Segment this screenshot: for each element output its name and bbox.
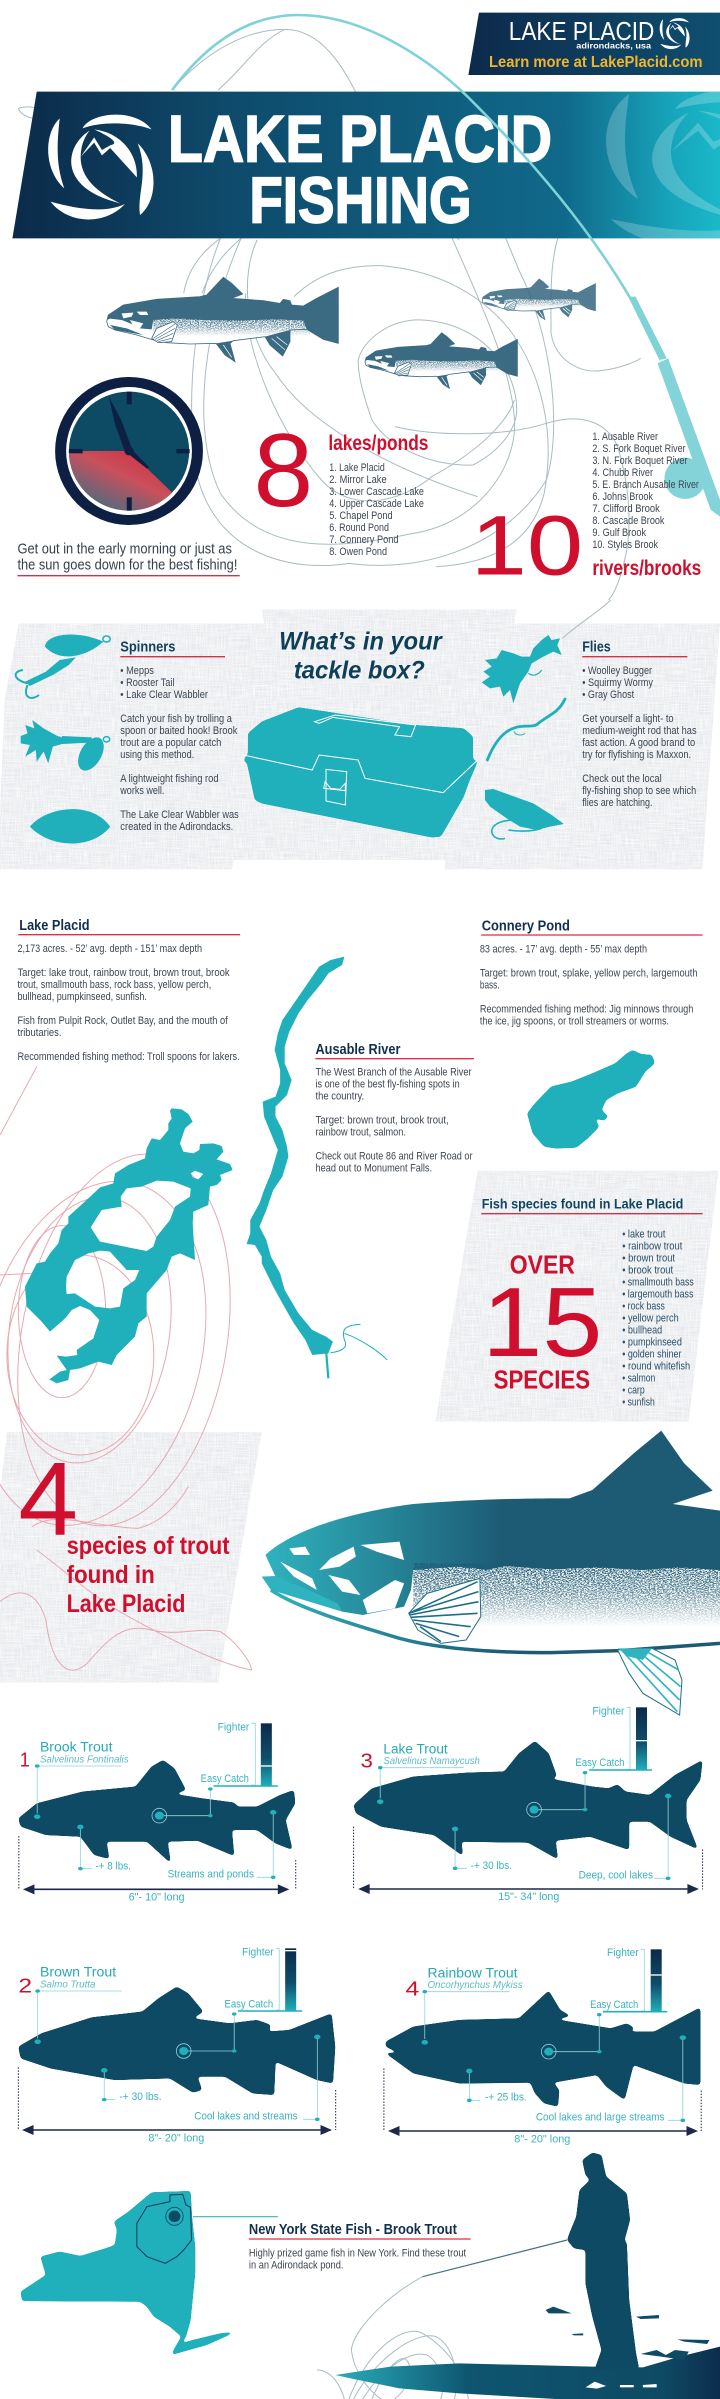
icon: reel [664, 458, 706, 499]
pelvic fin [618, 1648, 682, 1715]
text: flies: flies are hatching. [582, 796, 653, 808]
species list: • rock bass [622, 1299, 665, 1312]
text: spinners: works well. [120, 784, 164, 796]
title banner [12, 89, 720, 246]
rivers list: 4. Chubb River [592, 466, 653, 478]
lakes list: 3. Lower Cascade Lake [329, 485, 424, 497]
text: Ausable River: rainbow trout, salmon. [315, 1125, 406, 1138]
trout card 4: rainbow trout: Oncorhynchus Mykiss [428, 1980, 523, 1990]
fish lower jaw [262, 1576, 342, 1612]
decorative pink line loops [0, 1067, 254, 1670]
rod [422, 2240, 567, 2277]
text: flies: • Gray Ghost [582, 688, 634, 700]
fish speckled flank [413, 1563, 720, 1627]
rivers list: 9. Gulf Brook [592, 526, 647, 538]
trout card 4: rainbow trout: Fighter [607, 1946, 639, 1958]
trout card 1: brook trout: -+ 8 lbs. [96, 1859, 131, 1872]
trout card 2: brown trout: Easy Catch [225, 1998, 273, 2010]
paint splashes [546, 2307, 709, 2389]
species list: • pumpkinseed [622, 1336, 682, 1348]
text: Ausable River: The West Branch of the Ausable River [315, 1065, 472, 1078]
callout: 4 species of trout: Lake Placid [67, 1590, 186, 1618]
text: New York State Fish: in an Adirondack pond. [249, 2259, 343, 2271]
icon: fly 2 [485, 789, 564, 839]
header badge: Lake Placid link [468, 13, 720, 75]
text: Lake Placid: Recommended fishing method: Troll spoons for lakers. [17, 1050, 240, 1062]
map: Lake Placid [25, 1108, 233, 1383]
trout card 4: rainbow trout: 8"- 20" long [514, 2132, 570, 2145]
text: Lake Placid: bullhead, pumpkinseed, sunfish. [17, 990, 147, 1002]
text: spinners: using this method. [120, 748, 194, 760]
trout card 4: rainbow trout: 4 [405, 1977, 419, 2001]
species list: • brook trout [622, 1263, 673, 1276]
icon: ghost logo [606, 89, 720, 246]
callout: over 15 species: OVER [510, 1250, 575, 1279]
lakes list: 7. Connery Pond [329, 533, 399, 545]
trout card 1: brook trout [18, 1721, 296, 1903]
species list: • brown trout [622, 1251, 675, 1264]
icon: spinner 1 [16, 635, 110, 698]
species list [622, 1227, 694, 1408]
text: New York State Fish: Highly prized game fish in New York. Find these trout [249, 2247, 466, 2259]
trout card 2: brown trout: Fighter [242, 1946, 274, 1958]
text: flies: Check out the local [582, 772, 662, 784]
species list: • rainbow trout [622, 1239, 683, 1252]
fish underside outline [271, 1590, 720, 1653]
text: spinners: A lightweight fishing rod [120, 772, 219, 784]
clock hands [109, 397, 132, 452]
icon: worm [487, 699, 565, 760]
callout: over 15 species: SPECIES [494, 1365, 590, 1394]
text: Lake Placid: 2,173 acres. - 52’ avg. depth - 151’ max depth [17, 942, 202, 954]
trout card 2: brown trout: Salmo Trutta [40, 1979, 96, 1990]
text: Connery Pond [480, 917, 703, 1027]
text: spinners: • Mepps [120, 664, 154, 676]
rivers list: 8. Cascade Brook [592, 514, 665, 526]
text: Ausable River: Target: brown trout, brook trout, [315, 1113, 449, 1126]
illustration: large trout [262, 1431, 720, 1715]
callout: 4 species of trout [18, 1440, 230, 1618]
trout card 2: brown trout: Brown Trout [40, 1964, 116, 1980]
lakes list: 1. Lake Placid [329, 461, 385, 473]
species list: • lake trout [622, 1227, 666, 1240]
lakes and ponds count: 8 [253, 412, 313, 528]
text: Connery Pond: bass. [480, 978, 500, 991]
callout: 4 species of trout: 4 [18, 1440, 78, 1557]
trout card 1: brook trout: Easy Catch [201, 1772, 249, 1784]
hook line [563, 600, 611, 638]
species list: • yellow perch [622, 1311, 679, 1324]
lakes list: 4. Upper Cascade Lake [329, 497, 424, 509]
trout card 4: rainbow trout [384, 1946, 701, 2145]
panel: fish species [435, 1171, 719, 1422]
text: Lake Placid: tributaries. [17, 1026, 62, 1038]
pectoral fin [409, 1578, 481, 1643]
illustration: large trout [107, 277, 338, 362]
trout card 1: brook trout: Salvelinus Fontinalis [40, 1754, 129, 1765]
heading: what's in your tackle box: tackle box? [294, 656, 425, 684]
lakes list: 6. Round Pond [329, 521, 389, 533]
heading: what's in your tackle box [279, 627, 443, 684]
lakes and ponds count [253, 412, 428, 557]
rivers and brooks count: 10 [471, 498, 583, 593]
species list: • salmon [622, 1372, 655, 1384]
text: New York State Fish: New York State Fish - Brook Trout [249, 2221, 457, 2237]
lakes list [329, 461, 424, 557]
clock caption: the sun goes down for the best fishing! [17, 556, 237, 573]
text: spinners: • Rooster Tail [120, 676, 174, 688]
clock caption: Get out in the early morning or just as [17, 540, 232, 557]
text: flies: Flies [582, 638, 611, 655]
text: Ausable River: the country. [315, 1089, 364, 1102]
fish head highlights [280, 1542, 404, 1613]
lakes list: 5. Chapel Pond [329, 509, 393, 521]
text: flies [582, 638, 697, 808]
rivers list: 6. Johns Brook [592, 490, 653, 502]
trout card 2: brown trout [18, 1946, 336, 2144]
text: flies: • Woolley Bugger [582, 664, 653, 676]
trout card 1: brook trout: 6"- 10" long [129, 1891, 185, 1903]
trout card 3: lake trout: 15"- 34" long [498, 1890, 559, 1902]
text: Ausable River: Check out Route 86 and River Road or [315, 1149, 473, 1162]
text: spinners: Spinners [120, 638, 176, 655]
rivers list: 1. Ausable River [592, 430, 659, 442]
clock caption [17, 540, 240, 576]
text: Ausable River: head out to Monument Falls. [315, 1161, 432, 1174]
text: spinners: trout are a popular catch [120, 736, 221, 748]
fish upper body [265, 1431, 720, 1615]
trout card 1: brook trout: 1 [20, 1748, 30, 1772]
text: Lake Placid [17, 917, 240, 1062]
callout: 4 species of trout: found in [67, 1561, 155, 1589]
icon: spinner 3 [30, 809, 110, 844]
icon: logo [48, 115, 154, 219]
trout card 3: lake trout [354, 1704, 703, 1902]
silhouette [567, 2153, 639, 2369]
fishing lines [18, 29, 641, 600]
trout card 1: brook trout: Brook Trout [40, 1739, 113, 1755]
rivers and brooks count [471, 430, 701, 593]
trout card 3: lake trout: Salvelinus Namaycush [383, 1756, 480, 1766]
callout: over 15 species [482, 1250, 602, 1394]
trout card 3: lake trout: 3 [360, 1749, 373, 1773]
illustration: medium trout [365, 333, 517, 388]
fly line and rod [172, 15, 720, 517]
text: flies: • Squirmy Wormy [582, 676, 653, 688]
rivers list: 10. Styles Brook [592, 538, 658, 550]
panel: tackle box [0, 600, 720, 869]
text: Ausable River: is one of the best fly-fishing spots in [315, 1077, 460, 1090]
ground brush [335, 2347, 720, 2399]
trout card 1: brook trout: Streams and ponds [168, 1868, 254, 1880]
icon: tackle box [243, 707, 478, 837]
species list: • golden shiner [622, 1348, 682, 1360]
icon: fly 1 [482, 635, 562, 703]
rivers list [592, 430, 699, 550]
trout card 2: brown trout: -+ 30 lbs. [119, 2090, 162, 2102]
trout card 4: rainbow trout: -+ 25 lbs. [485, 2091, 527, 2103]
text: New York State Fish [249, 2221, 471, 2271]
illustration: small trout [482, 279, 595, 320]
title text: FISHING [249, 163, 472, 236]
text: spinners: • Lake Clear Wabbler [120, 688, 209, 700]
text: spinners: spoon or baited hook! Brook [120, 724, 238, 736]
illustration: fisherman [317, 2153, 720, 2399]
trout card 2: brown trout: 8"- 20" long [148, 2132, 204, 2144]
trout card 4: rainbow trout: Easy Catch [590, 1998, 638, 2010]
lakes list: 8. Owen Pond [329, 545, 387, 557]
species list: • sunfish [622, 1395, 655, 1408]
callout: over 15 species: 15 [482, 1267, 602, 1378]
trout card 3: lake trout: Easy Catch [575, 1756, 625, 1768]
title text [168, 102, 552, 236]
text: Lake Placid: Fish from Pulpit Rock, Outlet Bay, and the mouth of [17, 1014, 228, 1026]
fishing line loops [317, 2277, 468, 2399]
clock [55, 377, 203, 525]
trout card 3: lake trout: Lake Trout [383, 1741, 448, 1757]
map: Connery Pond [527, 1050, 655, 1148]
rivers list: 7. Clifford Brook [592, 502, 660, 514]
text: Ausable River [315, 1041, 474, 1174]
text: spinners: The Lake Clear Wabbler was [120, 808, 239, 820]
lakes and ponds count: lakes/ponds [328, 432, 428, 455]
text: spinners [120, 638, 239, 832]
callout: 4 species of trout: species of trout [67, 1532, 230, 1560]
text: spinners: Catch your fish by trolling a [120, 712, 233, 724]
text: spinners: created in the Adirondacks. [120, 820, 233, 832]
trout card 2: brown trout: 2 [18, 1974, 32, 1997]
icon: small logo [660, 18, 690, 49]
lakes list: 2. Mirror Lake [329, 473, 387, 485]
map: New York State [21, 2191, 278, 2355]
trout card 4: rainbow trout: Rainbow Trout [428, 1965, 518, 1981]
panel: four species [0, 1432, 262, 1683]
map: Ausable River [247, 957, 387, 1378]
icon: spinner 2 [21, 720, 110, 773]
text: Lake Placid: Target: lake trout, rainbow trout, brown trout, brook [17, 966, 230, 978]
trout card 3: lake trout: Deep, cool lakes [579, 1868, 653, 1881]
species list: • carp [622, 1384, 645, 1396]
trout card 2: brown trout: Cool lakes and streams [194, 2110, 298, 2122]
trout card 3: lake trout: -+ 30 lbs. [471, 1859, 512, 1871]
heading: what's in your tackle box: What’s in your [279, 627, 443, 655]
text: Ausable River: Ausable River [315, 1041, 401, 1057]
text: Lake Placid: Lake Placid [19, 917, 90, 933]
trout card 1: brook trout: Fighter [218, 1721, 250, 1733]
trout card 3: lake trout: Fighter [592, 1704, 625, 1717]
header badge: Lake Placid link: adirondacks, usa [576, 42, 651, 51]
fish group [107, 277, 595, 388]
species list: • bullhead [622, 1323, 662, 1336]
text: Connery Pond: Connery Pond [482, 917, 570, 934]
text: Lake Placid: trout, smallmouth bass, rock bass, yellow perch, [17, 978, 211, 990]
